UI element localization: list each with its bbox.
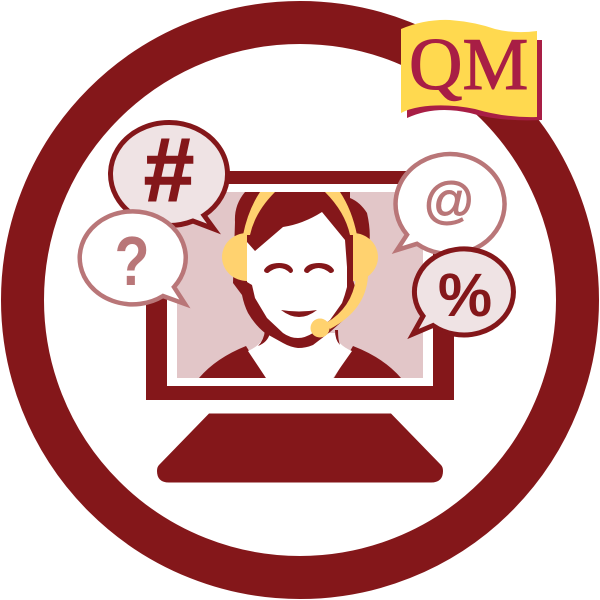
speech bubble: percent bbox=[413, 249, 513, 335]
left ear cup bbox=[222, 233, 247, 281]
flag body bbox=[401, 20, 537, 117]
monitor screen margin bbox=[167, 184, 433, 386]
monitor frame bbox=[146, 171, 454, 400]
microphone boom bbox=[326, 276, 368, 329]
speech bubble: question mark: ? bbox=[114, 222, 150, 300]
speech bubble: question mark bbox=[80, 211, 186, 304]
right ear cup bbox=[353, 233, 378, 281]
neck shadows bbox=[258, 330, 340, 346]
mouth bbox=[281, 310, 317, 317]
speech bubble: at sign: @ bbox=[423, 172, 475, 229]
microphone bbox=[310, 318, 330, 338]
face bbox=[247, 212, 347, 338]
headset band bbox=[243, 192, 357, 235]
screen background bbox=[177, 192, 423, 378]
QM letters: QM bbox=[409, 24, 528, 106]
neck and shirt bbox=[248, 333, 352, 378]
monitor stand bbox=[157, 414, 443, 482]
monitor bbox=[146, 171, 454, 400]
hair and head outline bbox=[233, 192, 370, 348]
shoulders bbox=[199, 346, 401, 378]
right eye bbox=[304, 263, 334, 273]
QM flag logo bbox=[401, 20, 542, 120]
speech bubble: hash: # bbox=[144, 121, 194, 221]
speech bubble: percent: % bbox=[438, 261, 492, 329]
speech bubble: at sign bbox=[396, 154, 505, 254]
support agent portrait bbox=[199, 192, 401, 378]
left eye bbox=[264, 263, 293, 273]
flag shadow bbox=[407, 40, 542, 120]
speech bubble: hash bbox=[111, 121, 228, 229]
